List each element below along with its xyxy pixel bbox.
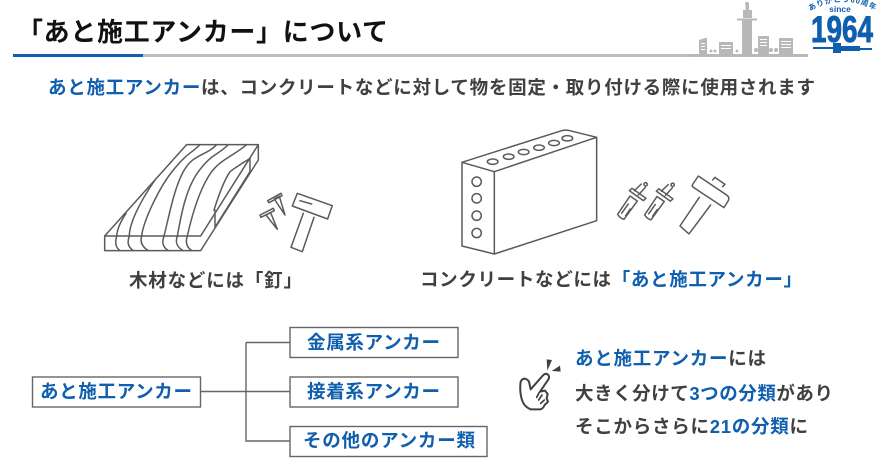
lead sentence: あと施工アンカーは、コンクリートなどに対して物を固定・取り付ける際に使用されます — [48, 77, 815, 98]
icon: city skyline with tower — [690, 2, 808, 56]
box: metal anchor: 金属系アンカー — [307, 332, 440, 353]
icon: two nails — [260, 193, 285, 229]
box: root anchor type: あと施工アンカー — [40, 381, 192, 402]
icon: anchor bolt left — [618, 183, 647, 219]
logo: 1964 anniversary badge: since — [829, 4, 851, 14]
callout text — [575, 348, 833, 437]
title underline — [13, 54, 808, 57]
illustration caption: wood and nail: 木材などには「釘」 — [129, 270, 302, 291]
callout text: 大きく分けて3つの分類があり — [575, 383, 833, 404]
box: other anchors — [290, 426, 487, 456]
box: other anchors: その他のアンカー類 — [303, 430, 475, 451]
icon: anchor bolt right — [645, 183, 674, 220]
callout text: あと施工アンカーには — [575, 348, 766, 369]
icon: hammer — [291, 193, 332, 252]
title: 「あと施工アンカー」について — [17, 17, 388, 47]
tree diagram connectors — [200, 342, 290, 441]
box: adhesive anchor: 接着系アンカー — [307, 381, 440, 402]
illustration: concrete block — [462, 130, 597, 254]
callout text: そこからさらに21の分類に — [575, 416, 808, 437]
illustration caption: concrete and anchor: コンクリートなどには「あと施工アンカー」 — [420, 269, 802, 290]
box: adhesive anchor — [290, 377, 458, 407]
icon: finger snap hand — [520, 359, 561, 409]
box: root anchor type — [32, 377, 200, 407]
box: metal anchor — [290, 328, 458, 358]
icon: anchor hammer — [680, 176, 729, 234]
illustration: wood plank — [105, 145, 258, 251]
